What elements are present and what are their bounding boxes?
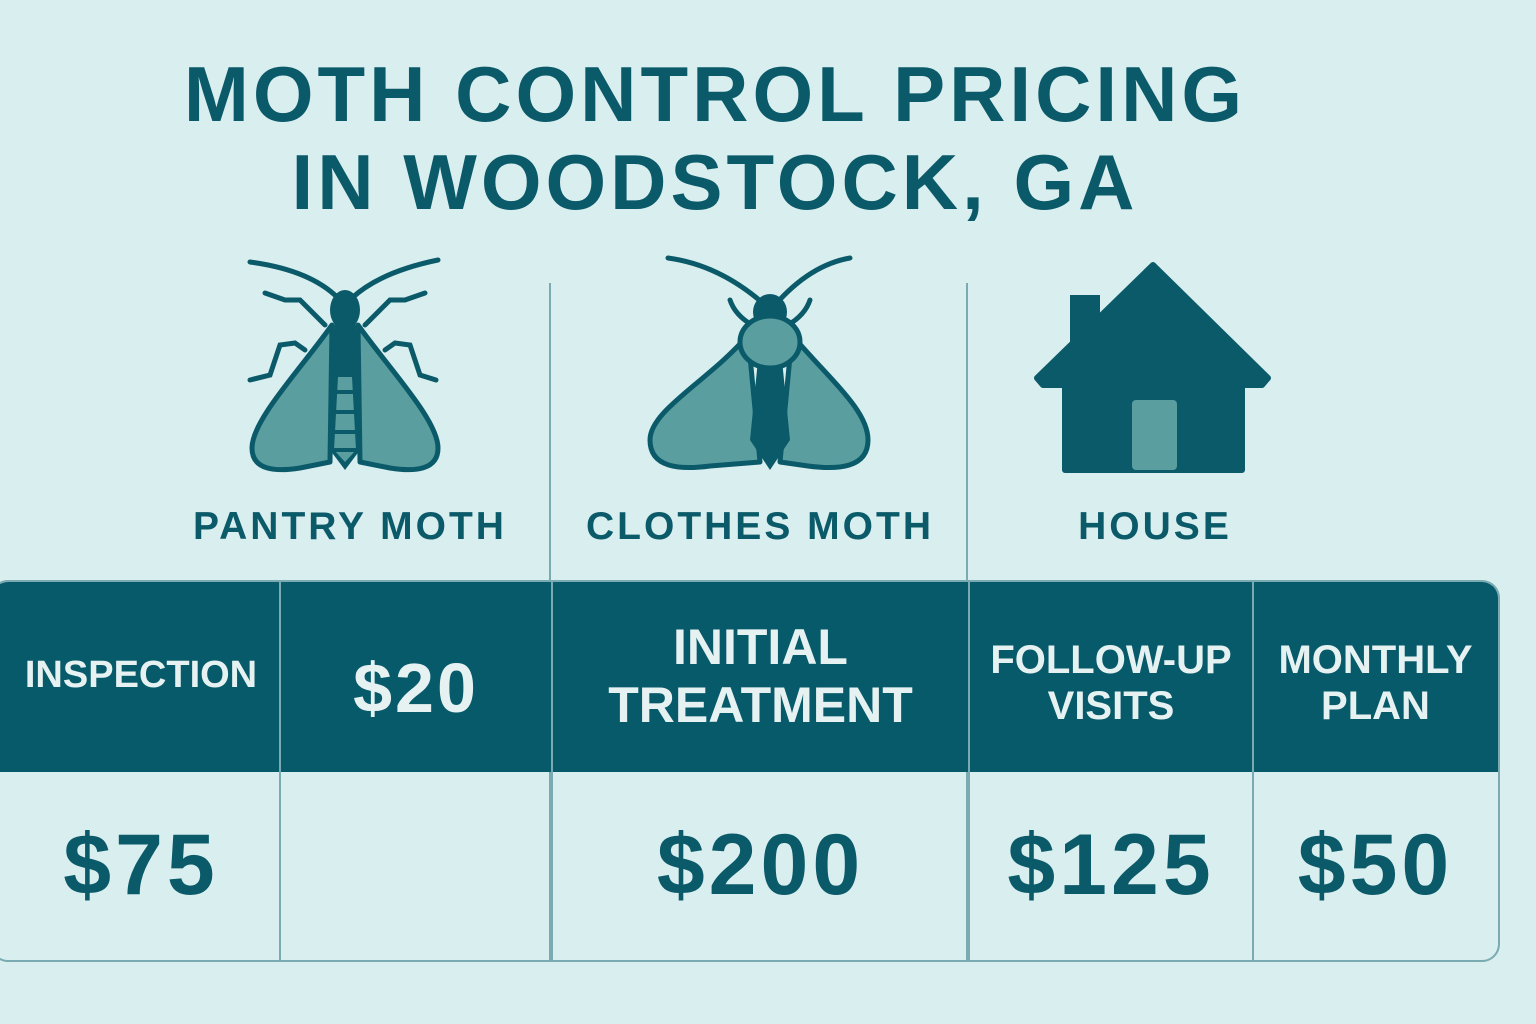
label: clothes moth: CLOTHES MOTH <box>586 505 934 548</box>
icon: house <box>1034 262 1271 473</box>
label: pantry moth: PANTRY MOTH <box>193 505 507 548</box>
header: inspection: INSPECTION <box>25 654 257 696</box>
header: monthly plan: MONTHLY <box>1278 638 1473 682</box>
title: MOTH CONTROL PRICING <box>184 50 1246 138</box>
price: $125: $125 <box>1007 817 1215 913</box>
header: follow-up visits: FOLLOW-UP <box>990 638 1232 682</box>
header: initial treatment: INITIAL <box>673 619 848 675</box>
header: monthly plan <box>1278 638 1473 728</box>
title <box>184 50 1246 226</box>
header: initial treatment <box>608 619 913 733</box>
header: follow-up visits <box>990 638 1232 728</box>
icon: pantry moth <box>248 258 440 472</box>
header row <box>0 582 1498 772</box>
price: $75: $75 <box>63 817 219 913</box>
price: $50: $50 <box>1298 817 1453 913</box>
header: $20: $20 <box>353 649 479 727</box>
pricing table <box>0 580 1500 962</box>
title: IN WOODSTOCK, GA <box>292 138 1138 226</box>
price: $200: $200 <box>657 817 864 913</box>
header: follow-up visits: VISITS <box>1048 684 1174 728</box>
header: initial treatment: TREATMENT <box>608 677 913 733</box>
icon: clothes moth <box>648 256 870 470</box>
label: house: HOUSE <box>1078 505 1232 548</box>
header: monthly plan: PLAN <box>1321 684 1430 728</box>
